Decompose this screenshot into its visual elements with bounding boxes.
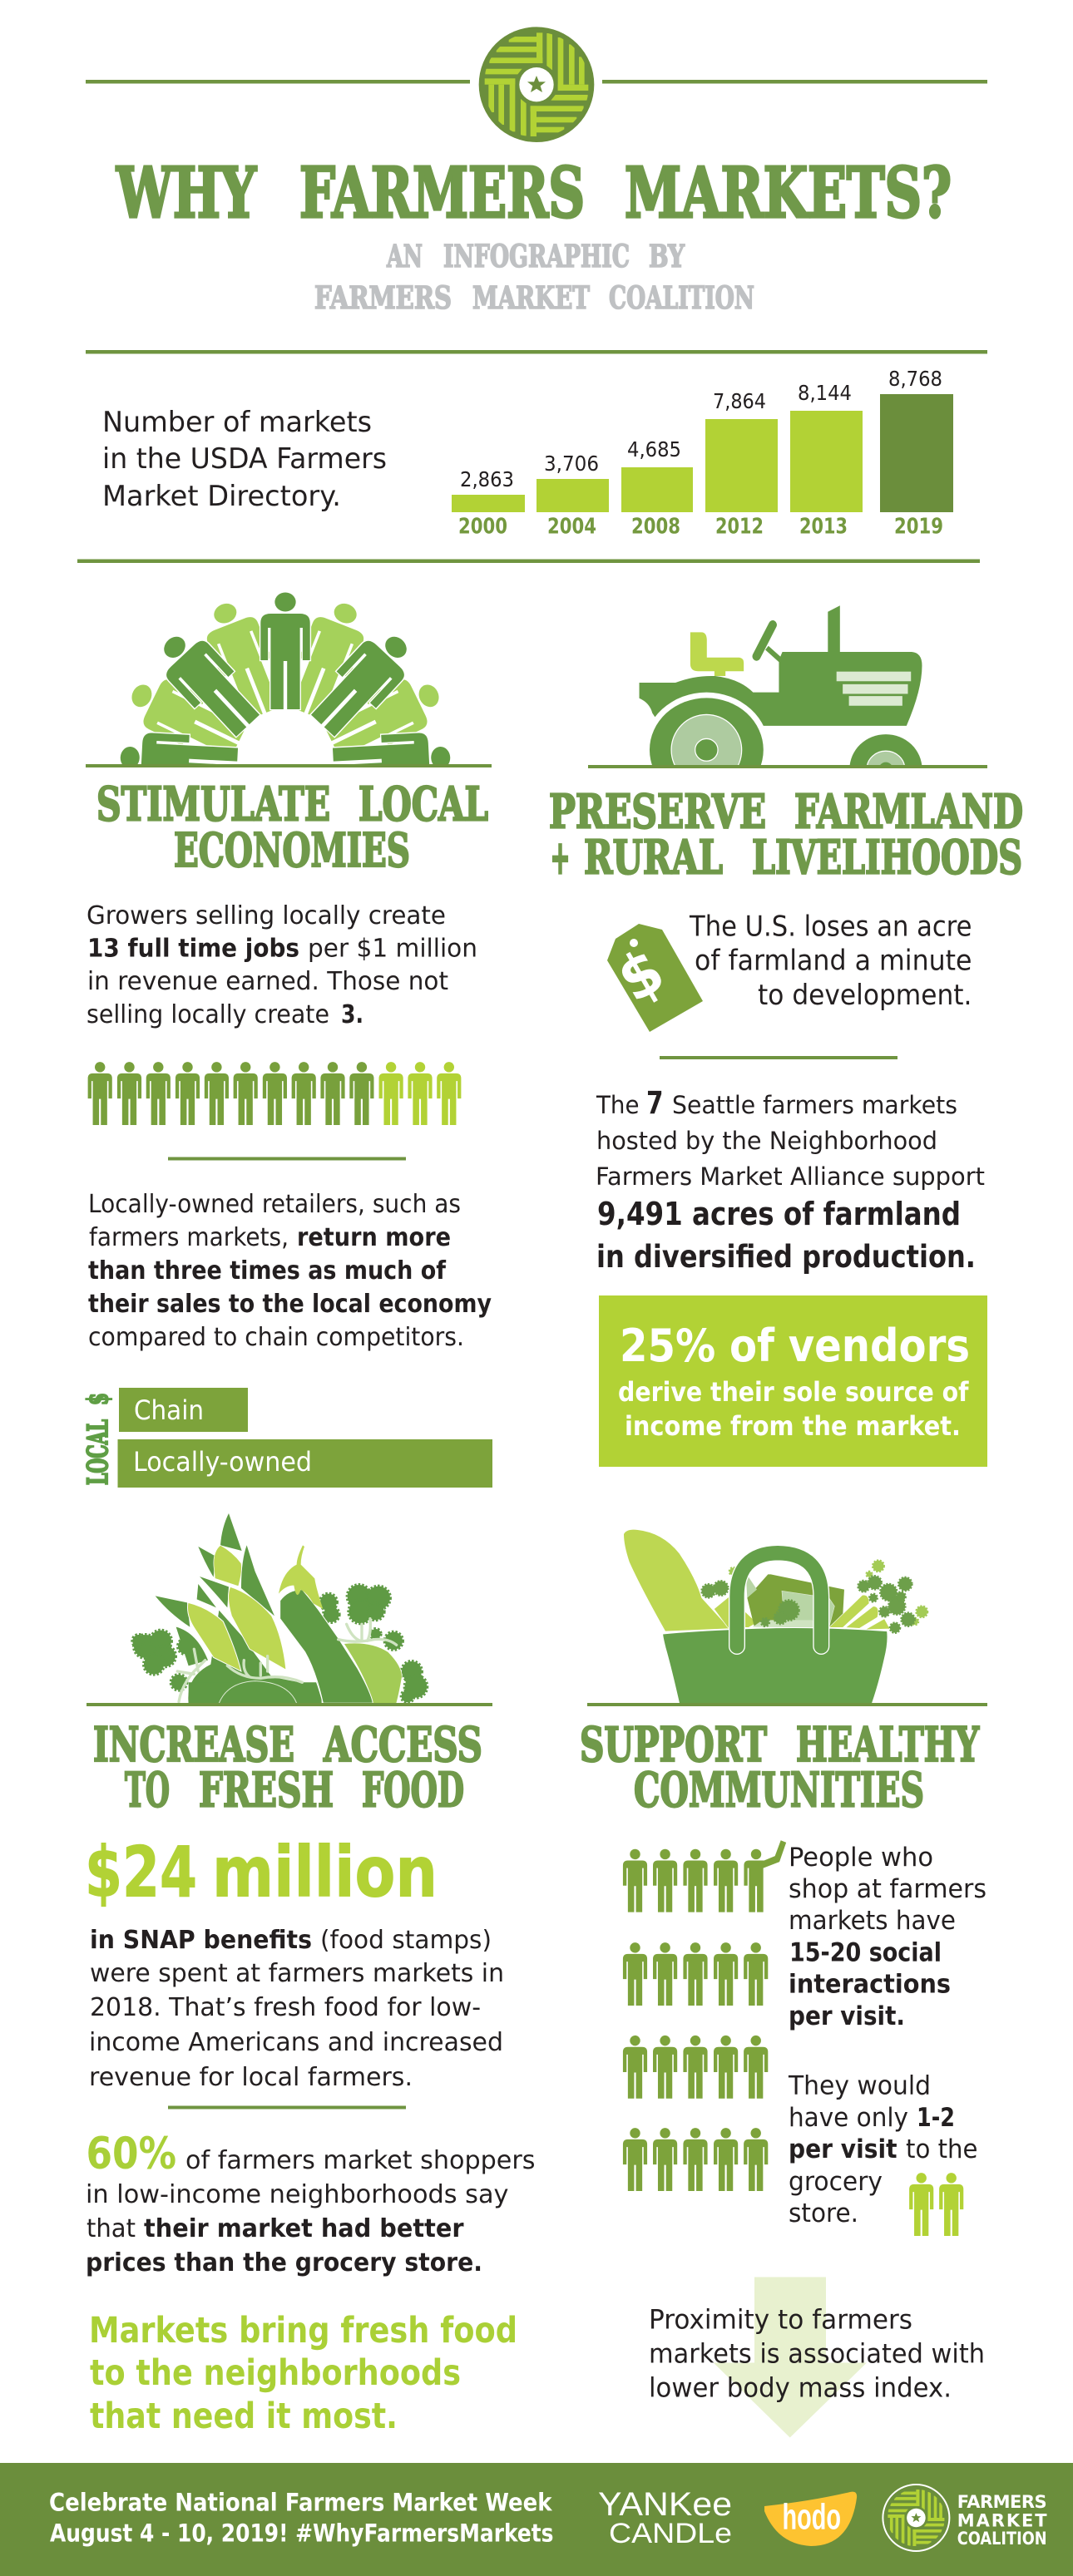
text: seattle markets: hosted by the Neighborhood xyxy=(596,1127,937,1155)
bar chart: 2012 xyxy=(715,514,764,539)
text: locally-owned retailers: Locally-owned retailers, such as xyxy=(88,1190,461,1219)
heading xyxy=(580,1717,980,1818)
title: FARMERS xyxy=(299,152,585,234)
text: seattle markets: 9,491 acres of farmland xyxy=(597,1196,961,1232)
bar chart: 8,768 xyxy=(888,367,942,391)
subtitle xyxy=(314,238,754,316)
text: acre a minute: of farmland a minute xyxy=(695,945,972,978)
bar chart: 4,685 xyxy=(627,437,681,461)
icon: sunburst of people xyxy=(86,592,492,767)
callout: markets bring fresh food: to the neighborhoods xyxy=(90,2352,461,2394)
title: MARKETS? xyxy=(625,152,952,234)
chart description xyxy=(102,406,387,513)
text: jobs: selling locally create xyxy=(87,1000,329,1029)
icon: price tag xyxy=(606,924,703,1032)
text: seattle markets: The xyxy=(596,1091,639,1119)
heading xyxy=(96,777,488,878)
title xyxy=(116,152,952,234)
callout: 25% of vendors: derive their sole source of xyxy=(618,1376,969,1408)
icon: tractor xyxy=(588,605,987,768)
header xyxy=(86,27,987,316)
text: locally-owned retailers: than three times as much of xyxy=(88,1256,447,1286)
heading: INCREASE xyxy=(93,1717,294,1773)
text: acre a minute xyxy=(689,910,972,1012)
text: jobs: Growers selling locally create xyxy=(87,901,446,930)
logo: hodo: hodo xyxy=(782,2496,841,2538)
heading xyxy=(93,1717,482,1818)
text: 60% of shoppers: their market had better xyxy=(144,2214,464,2243)
panel: preserve farmland xyxy=(549,605,1023,1467)
bar chart: 7,864 xyxy=(713,389,766,413)
text: grocery store comparison: grocery xyxy=(789,2167,883,2197)
text: social interactions: markets have xyxy=(789,1906,956,1936)
axis label: LOCAL xyxy=(82,1419,115,1485)
text: 60% of shoppers: of farmers market shoppers xyxy=(185,2146,536,2175)
heading: HEALTHY xyxy=(796,1717,980,1773)
text: social interactions xyxy=(789,1843,986,2031)
subtitle: MARKET xyxy=(472,279,590,316)
text: 60% of shoppers: 60% xyxy=(87,2129,176,2179)
callout: markets bring fresh food xyxy=(89,2310,517,2437)
text: SNAP benefits: (food stamps) xyxy=(320,1926,492,1955)
heading: ECONOMIES xyxy=(174,823,410,878)
text: grocery store comparison: to the xyxy=(906,2134,978,2164)
bar chart: 8,144 xyxy=(798,381,852,405)
text: locally-owned retailers: compared to chain competitors. xyxy=(88,1323,464,1352)
text: SNAP benefits: 2018. That’s fresh food for low- xyxy=(90,1993,481,2022)
logo: Farmers Market Coalition xyxy=(883,2485,1047,2551)
panel: support healthy communities xyxy=(580,1530,987,2438)
icon: vegetables xyxy=(87,1513,492,1706)
text: seattle markets: Seattle farmers markets xyxy=(672,1091,957,1119)
logo badge xyxy=(479,27,594,142)
axis label: $ xyxy=(82,1393,115,1405)
text: proximity xyxy=(649,2303,985,2403)
text: 60% of shoppers: prices than the grocery store. xyxy=(86,2248,482,2277)
text: locally-owned retailers xyxy=(88,1190,492,1352)
text: seattle markets xyxy=(596,1085,985,1275)
icon grid: 20 people xyxy=(623,1840,786,2191)
heading: TO xyxy=(125,1763,170,1818)
text: proximity: Proximity to farmers xyxy=(649,2303,912,2335)
arrow: lower body mass index xyxy=(714,2277,867,2438)
heading: ACCESS xyxy=(323,1717,482,1773)
subtitle: COALITION xyxy=(609,279,754,316)
bar chart: 2004 xyxy=(547,514,596,539)
subtitle: INFOGRAPHIC xyxy=(443,238,630,274)
bar chart: 2,863 xyxy=(460,467,514,491)
chart description: in the USDA Farmers xyxy=(102,442,387,476)
icon: grocery bag xyxy=(587,1530,987,1706)
text: locally-owned retailers: farmers markets, xyxy=(89,1223,289,1252)
text: locally-owned retailers: return more xyxy=(297,1223,451,1252)
text: seattle markets: 7 xyxy=(646,1085,664,1121)
heading: FARMLAND xyxy=(794,785,1023,840)
bar chart: 2013 xyxy=(799,514,848,539)
subtitle: BY xyxy=(649,238,685,274)
text: proximity: markets is associated with xyxy=(649,2338,985,2370)
logo: Farmers Market Coalition: COALITION xyxy=(957,2529,1047,2549)
header rule right xyxy=(602,80,987,83)
header rule left xyxy=(86,80,470,83)
text: acre a minute: to development. xyxy=(758,979,972,1012)
text: SNAP benefits: income Americans and increased xyxy=(89,2028,503,2057)
icon: two people xyxy=(909,2173,963,2236)
text: jobs: in revenue earned. Those not xyxy=(87,967,448,996)
text: grocery store comparison: They would xyxy=(788,2070,931,2100)
title: WHY xyxy=(116,152,257,234)
bar: locally-owned: Locally-owned xyxy=(133,1446,312,1478)
footer call to action: August 4 - 10, 2019! #WhyFarmersMarkets xyxy=(50,2519,554,2548)
subtitle: AN xyxy=(386,238,423,274)
icon: price tag: $ xyxy=(606,935,676,1017)
heading: SUPPORT xyxy=(580,1717,767,1773)
text: social interactions: People who xyxy=(789,1843,933,1873)
chart description: Number of markets xyxy=(102,406,372,439)
bar: locally-owned xyxy=(118,1439,492,1488)
text: grocery store comparison: 1-2 xyxy=(917,2103,955,2133)
bar chart xyxy=(452,367,953,539)
heading: PRESERVE xyxy=(549,785,766,840)
panel: number of markets xyxy=(102,367,953,539)
big stat: $24 million xyxy=(85,1831,438,1912)
footer call to action: Celebrate National Farmers Market Week xyxy=(49,2488,552,2516)
chart: local dollars xyxy=(82,1388,492,1488)
text: social interactions: per visit. xyxy=(789,2001,905,2031)
text: grocery store comparison: per visit xyxy=(789,2134,897,2164)
text: jobs xyxy=(87,901,477,1029)
callout: 25% of vendors xyxy=(599,1295,987,1467)
text: grocery store comparison xyxy=(788,2070,978,2228)
heading: + xyxy=(551,830,571,885)
text: acre a minute: The U.S. loses an acre xyxy=(689,910,972,943)
logo: Yankee Candle: YANKee xyxy=(598,2486,732,2523)
heading: RURAL xyxy=(584,830,723,885)
heading: FOOD xyxy=(362,1763,464,1818)
text: SNAP benefits: revenue for local farmers. xyxy=(89,2063,413,2092)
text: 60% of shoppers: in low-income neighborhoods say xyxy=(86,2180,509,2209)
bar: chain: Chain xyxy=(134,1394,204,1426)
big stat: $24 million: $24 xyxy=(85,1831,197,1912)
bar chart: 3,706 xyxy=(544,452,599,476)
logo: hodo xyxy=(764,2492,857,2546)
footer call to action xyxy=(49,2488,554,2548)
footer band xyxy=(0,2463,1073,2576)
text: 60% of shoppers xyxy=(86,2129,536,2277)
bar: chain xyxy=(119,1388,248,1432)
text: social interactions: shop at farmers xyxy=(789,1874,986,1904)
callout: markets bring fresh food: that need it most. xyxy=(90,2396,398,2437)
chart description: Market Directory. xyxy=(102,480,341,513)
text: seattle markets: Farmers Market Alliance support xyxy=(596,1162,985,1191)
logo: Farmers Market Coalition: MARKET xyxy=(957,2511,1047,2531)
text: proximity: lower body mass index. xyxy=(649,2371,952,2403)
icon row: 13 people xyxy=(88,1062,461,1125)
heading: LOCAL xyxy=(358,777,488,832)
subtitle: FARMERS xyxy=(314,279,452,316)
text: seattle markets: in diversified production. xyxy=(596,1239,976,1275)
panel: increase access to fresh food xyxy=(85,1513,536,2437)
text: SNAP benefits: in SNAP benefits xyxy=(90,1926,312,1955)
text: 60% of shoppers: that xyxy=(87,2214,136,2243)
text: locally-owned retailers: their sales to the local economy xyxy=(88,1290,492,1319)
bar chart: 2000 xyxy=(458,514,507,539)
text: social interactions: 15-20 social xyxy=(789,1937,942,1967)
text: SNAP benefits xyxy=(89,1926,504,2092)
heading xyxy=(549,785,1023,885)
callout: markets bring fresh food: Markets bring fresh food xyxy=(89,2310,517,2351)
callout: 25% of vendors: 25% of vendors xyxy=(620,1320,970,1372)
text: jobs: 3. xyxy=(341,1000,363,1029)
heading: COMMUNITIES xyxy=(634,1763,924,1818)
text: jobs: 13 full time jobs xyxy=(87,935,299,963)
logo: Yankee Candle: CANDLe xyxy=(609,2518,732,2549)
logo: Farmers Market Coalition: FARMERS xyxy=(957,2492,1047,2512)
heading: STIMULATE xyxy=(96,777,330,832)
text: grocery store comparison: have only xyxy=(789,2103,908,2133)
logo: Yankee Candle xyxy=(598,2486,732,2549)
panel: stimulate local economies xyxy=(82,592,492,1488)
text: grocery store comparison: store. xyxy=(789,2198,858,2228)
callout: 25% of vendors: income from the market. xyxy=(625,1410,961,1442)
bar chart: 2008 xyxy=(631,514,680,539)
heading: FRESH xyxy=(199,1763,334,1818)
text: jobs: per $1 million xyxy=(308,935,477,963)
bar chart: 2019 xyxy=(894,514,943,539)
big stat: $24 million: million xyxy=(212,1831,438,1912)
text: SNAP benefits: were spent at farmers markets in xyxy=(90,1959,504,1988)
text: social interactions: interactions xyxy=(789,1969,951,1999)
